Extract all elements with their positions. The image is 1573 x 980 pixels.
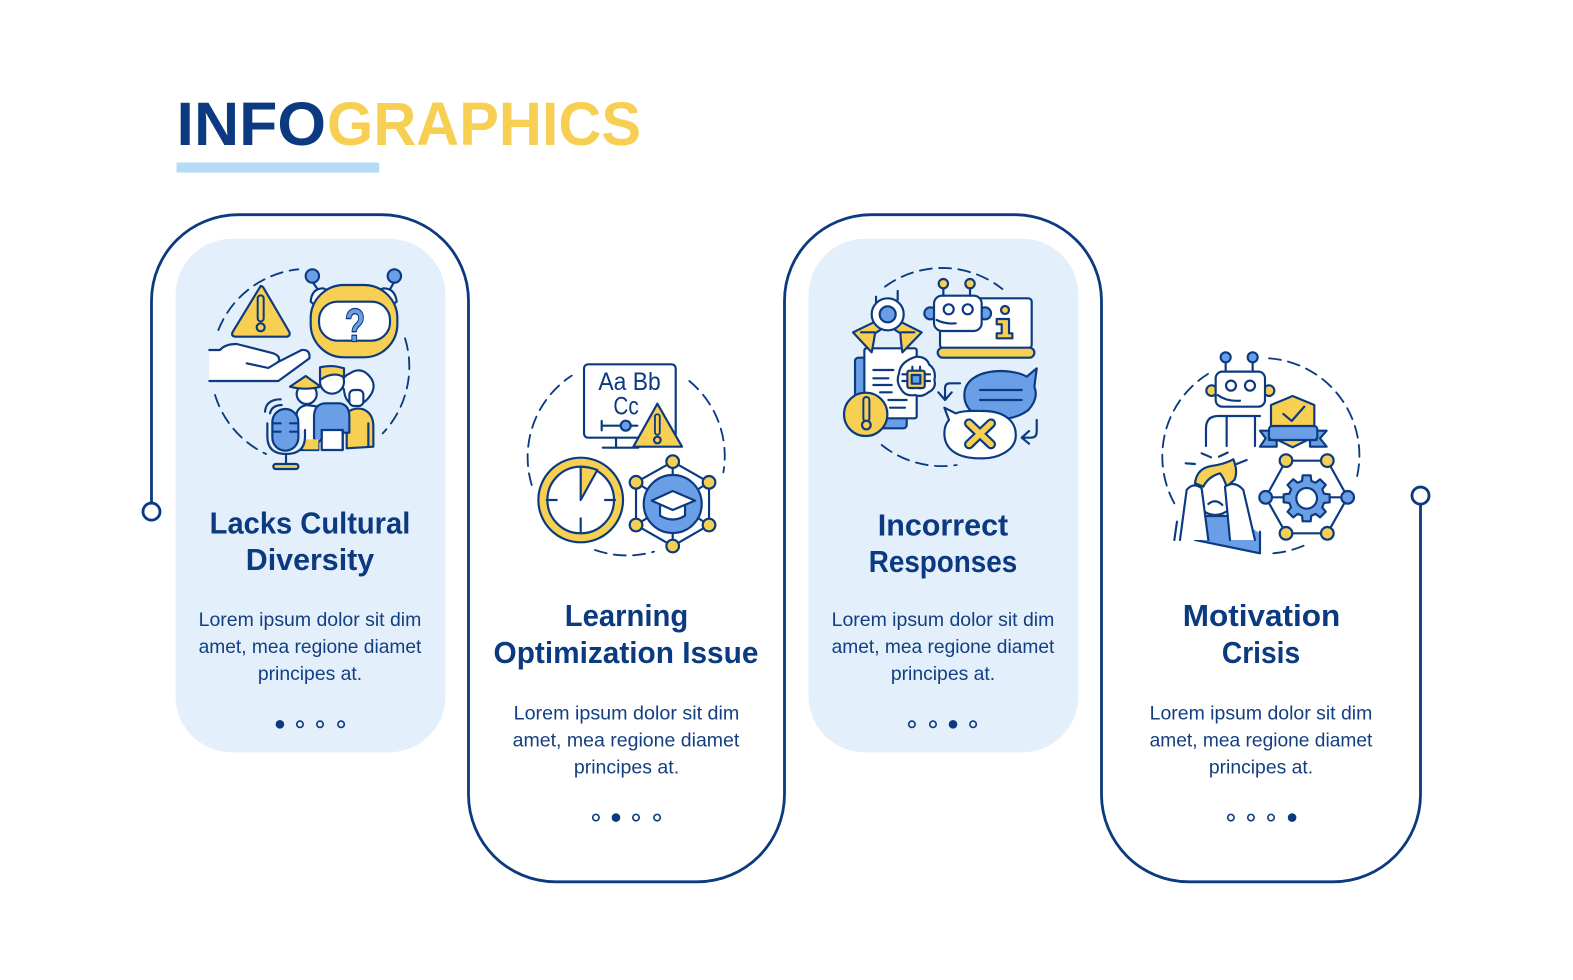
panel backgrounds: [176, 239, 1078, 752]
body text: amet, mea regione diamet: [1150, 730, 1373, 751]
pagination dots: [909, 721, 976, 728]
icon: robot, warning and diverse people: ?: [345, 299, 365, 352]
body text: [513, 703, 740, 778]
body text: amet, mea regione diamet: [513, 730, 740, 751]
body text: [832, 610, 1055, 685]
heading: learning optimization issue: [494, 600, 758, 670]
body text: principes at.: [1209, 757, 1313, 778]
heading: motivation crisis: Crisis: [1222, 637, 1300, 670]
panel: learning optimization issue: [494, 364, 758, 821]
body text: amet, mea regione diamet: [832, 637, 1055, 658]
panel: lacks cultural diversity: [199, 269, 422, 728]
body text: Lorem ipsum dolor sit dim: [199, 610, 421, 631]
pagination dots: [593, 814, 660, 821]
title: GRAPHICS: [327, 90, 641, 158]
body text: [199, 610, 422, 685]
icon: robot, warning and diverse people: [209, 269, 409, 469]
heading: incorrect responses: [869, 510, 1017, 579]
heading: motivation crisis: Motivation: [1183, 600, 1340, 633]
icon: monitor, clock and graduation network: Aa Bb: [598, 369, 661, 396]
body text: amet, mea regione diamet: [199, 637, 422, 658]
body text: principes at.: [258, 664, 362, 685]
title: INFO: [177, 90, 326, 158]
heading: learning optimization issue: Learning: [565, 600, 688, 633]
pagination dots: [1228, 814, 1296, 821]
panel: incorrect responses: [832, 268, 1055, 728]
pagination dots: [276, 721, 344, 728]
heading: incorrect responses: Incorrect: [878, 510, 1008, 543]
body text: Lorem ipsum dolor sit dim: [1150, 703, 1372, 724]
heading: lacks cultural diversity: Diversity: [246, 544, 374, 577]
heading: learning optimization issue: Optimization Issue: [494, 637, 758, 670]
body text: principes at.: [891, 664, 995, 685]
icon: robot, badge, stressed person and gear network: [1162, 352, 1359, 553]
connecting timeline outline: [143, 215, 1429, 882]
body text: principes at.: [574, 757, 679, 778]
panel: motivation crisis: [1150, 352, 1373, 821]
title: [177, 90, 641, 158]
heading: lacks cultural diversity: [210, 508, 410, 577]
icon: monitor, clock and graduation network: [528, 364, 725, 555]
body text: Lorem ipsum dolor sit dim: [514, 703, 739, 724]
body text: [1150, 703, 1373, 778]
icon: robot laptop, document and speech bubbles: [844, 268, 1037, 466]
heading: incorrect responses: Responses: [869, 546, 1017, 579]
title underline: [177, 163, 379, 173]
body text: Lorem ipsum dolor sit dim: [832, 610, 1054, 631]
icon: monitor, clock and graduation network: Cc: [613, 393, 639, 420]
heading: lacks cultural diversity: Lacks Cultural: [210, 508, 410, 541]
heading: motivation crisis: [1183, 600, 1340, 670]
